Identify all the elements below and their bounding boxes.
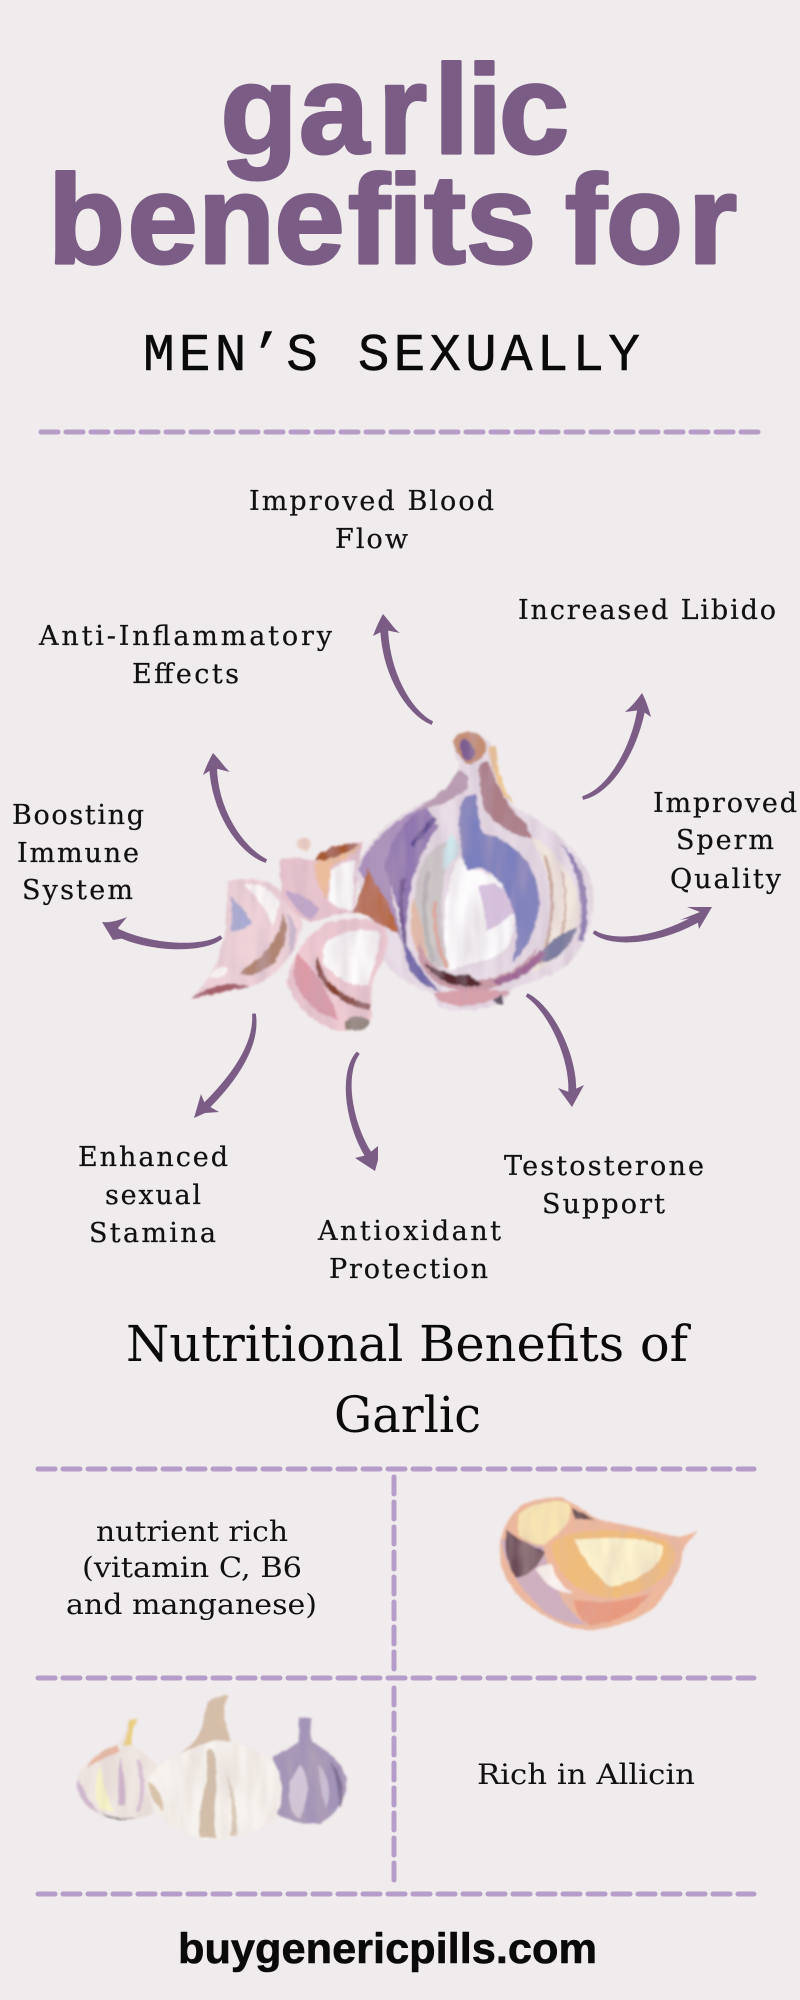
illustration: watercolor garlic bulb and cloves: [190, 732, 593, 1031]
benefit label: improved sperm quality: [653, 788, 797, 895]
icon: garlic clove: [500, 1498, 698, 1630]
benefit label: boosting immune system: Immune: [17, 838, 139, 869]
title: garlic: [220, 39, 569, 180]
benefit label: testosterone support: [504, 1151, 704, 1220]
benefit label: improved sperm quality: Quality: [670, 864, 782, 895]
benefit label: antioxidant protection: Protection: [329, 1254, 488, 1285]
footer url: buygenericpills.com: [178, 1925, 597, 1973]
icon: three garlic bulbs: [77, 1695, 347, 1840]
benefit label: anti-inflammatory effects: [38, 621, 333, 690]
garlic clove lower: [287, 919, 388, 1031]
garlic clove middle: [280, 838, 363, 922]
bulb center: [147, 1695, 281, 1840]
benefit label: anti-inflammatory effects: Anti-Inflammatory: [38, 621, 333, 652]
cell text: rich in allicin: Rich in Allicin: [477, 1758, 695, 1791]
benefit label: testosterone support: Testosterone: [504, 1151, 704, 1182]
benefit label: improved blood flow: Improved Blood: [249, 486, 494, 517]
arrow: to improved blood flow: [373, 614, 433, 724]
benefit label: improved blood flow: Flow: [335, 524, 408, 555]
benefit label: anti-inflammatory effects: Effects: [132, 659, 239, 690]
benefit label: enhanced sexual stamina: sexual: [105, 1180, 201, 1211]
bulb right: [273, 1718, 347, 1824]
benefit label: antioxidant protection: Antioxidant: [317, 1216, 501, 1247]
garlic main bulb: [353, 732, 593, 1010]
arrow: to boosting immune system: [102, 917, 222, 949]
cell text: nutrient rich: (vitamin C, B6: [82, 1551, 302, 1584]
section heading: Garlic: [334, 1386, 481, 1444]
section heading: Nutritional Benefits of: [126, 1315, 691, 1373]
benefit label: improved sperm quality: Improved: [653, 788, 797, 819]
arrow: to anti-inflammatory effects: [203, 753, 267, 862]
title: [48, 39, 737, 290]
arrow: to enhanced sexual stamina: [194, 1014, 256, 1118]
arrow: to antioxidant protection: [346, 1052, 378, 1171]
arrow: to increased libido: [583, 693, 651, 799]
benefit label: improved sperm quality: Sperm: [676, 825, 774, 856]
benefit label: increased libido: Increased Libido: [518, 595, 776, 626]
section heading: [126, 1315, 691, 1444]
benefit label: boosting immune system: [12, 800, 144, 906]
benefit label: testosterone support: Support: [542, 1189, 665, 1220]
benefit label: boosting immune system: System: [22, 875, 133, 906]
garlic clove left: [190, 879, 302, 1000]
benefit label: enhanced sexual stamina: Stamina: [89, 1218, 216, 1249]
title: benefits for: [48, 149, 737, 290]
arrow: to testosterone support: [526, 994, 584, 1107]
benefit label: enhanced sexual stamina: Enhanced: [78, 1142, 228, 1173]
benefit label: antioxidant protection: [317, 1216, 501, 1285]
benefit label: enhanced sexual stamina: [78, 1142, 228, 1249]
cell text: nutrient rich: and manganese): [66, 1588, 317, 1621]
cell text: nutrient rich: [66, 1515, 317, 1621]
subtitle: MEN’S SEXUALLY: [143, 326, 640, 386]
bulb left: [77, 1718, 158, 1820]
arrow: to improved sperm quality: [593, 907, 712, 942]
benefit label: improved blood flow: [249, 486, 494, 555]
cell text: nutrient rich: nutrient rich: [96, 1515, 288, 1548]
benefit label: boosting immune system: Boosting: [12, 800, 144, 831]
